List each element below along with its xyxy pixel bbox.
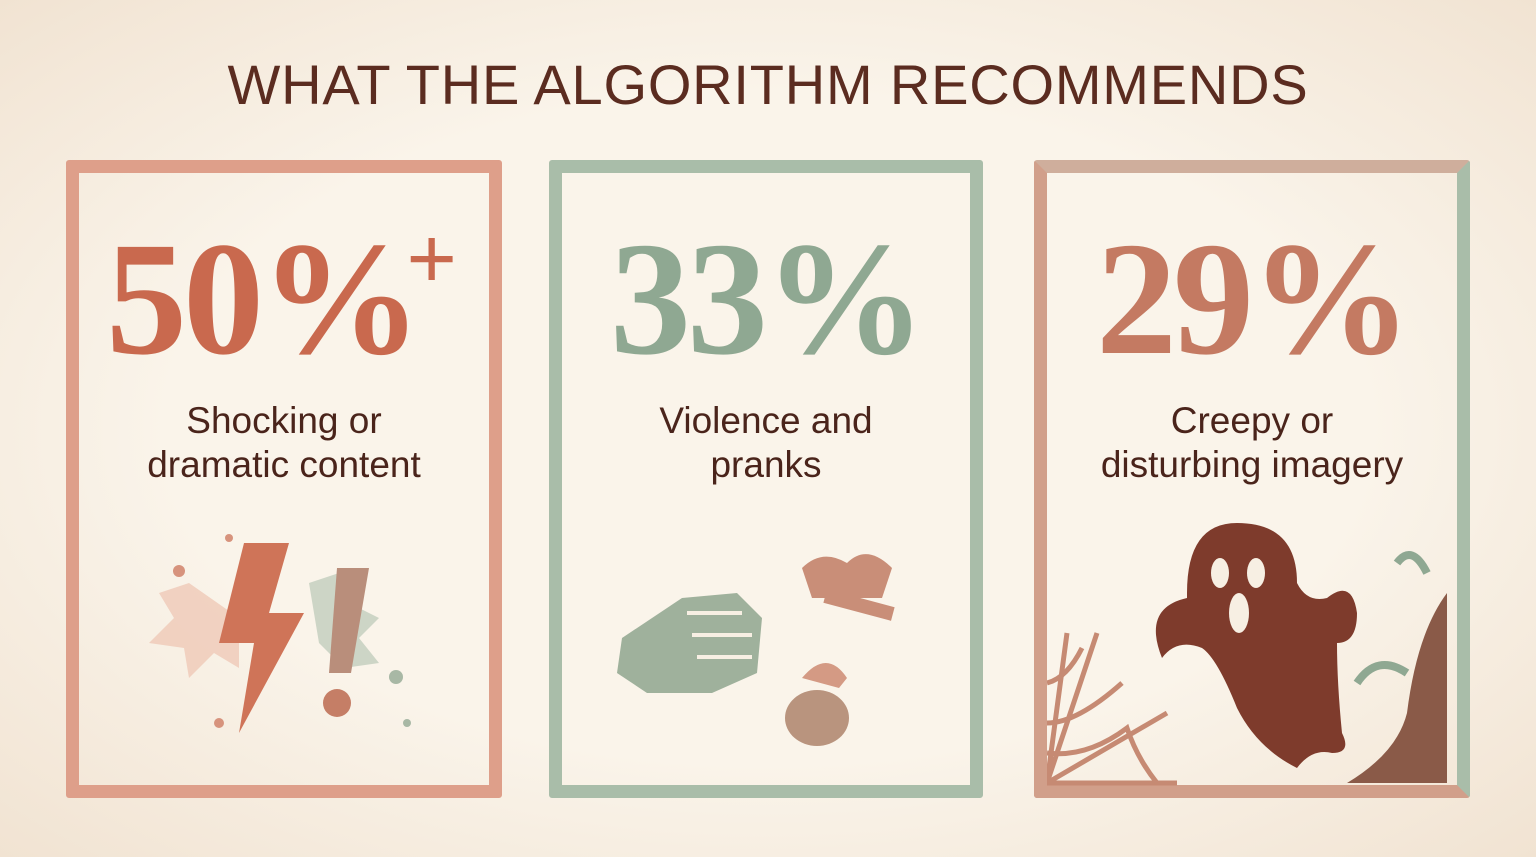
- label: creepy: disturbing imagery: [1101, 444, 1403, 485]
- label: shocking: Shocking or: [186, 400, 382, 441]
- number: 50%+: 50%: [106, 210, 418, 389]
- label: shocking: dramatic content: [147, 444, 421, 485]
- icon: fist, jester hat, egg: [617, 554, 895, 746]
- label: violence: Violence and: [659, 400, 873, 441]
- icon: ghost, web, tree: [1047, 523, 1447, 786]
- label: violence: [659, 400, 873, 485]
- number: 33%: 33%: [610, 210, 922, 389]
- label: creepy: Creepy or: [1171, 400, 1333, 441]
- panel: shocking: [66, 160, 502, 798]
- label: violence: pranks: [710, 444, 822, 485]
- title: WHAT THE ALGORITHM RECOMMENDS: [227, 53, 1309, 116]
- label: shocking: [147, 400, 421, 485]
- number: 29%: 29%: [1096, 210, 1408, 389]
- number: 50%+: +: [406, 210, 453, 309]
- icon: lightning and exclamation: [149, 534, 411, 733]
- panel: creepy: [1034, 160, 1470, 798]
- label: creepy: [1101, 400, 1403, 485]
- panel: violence: [549, 160, 983, 798]
